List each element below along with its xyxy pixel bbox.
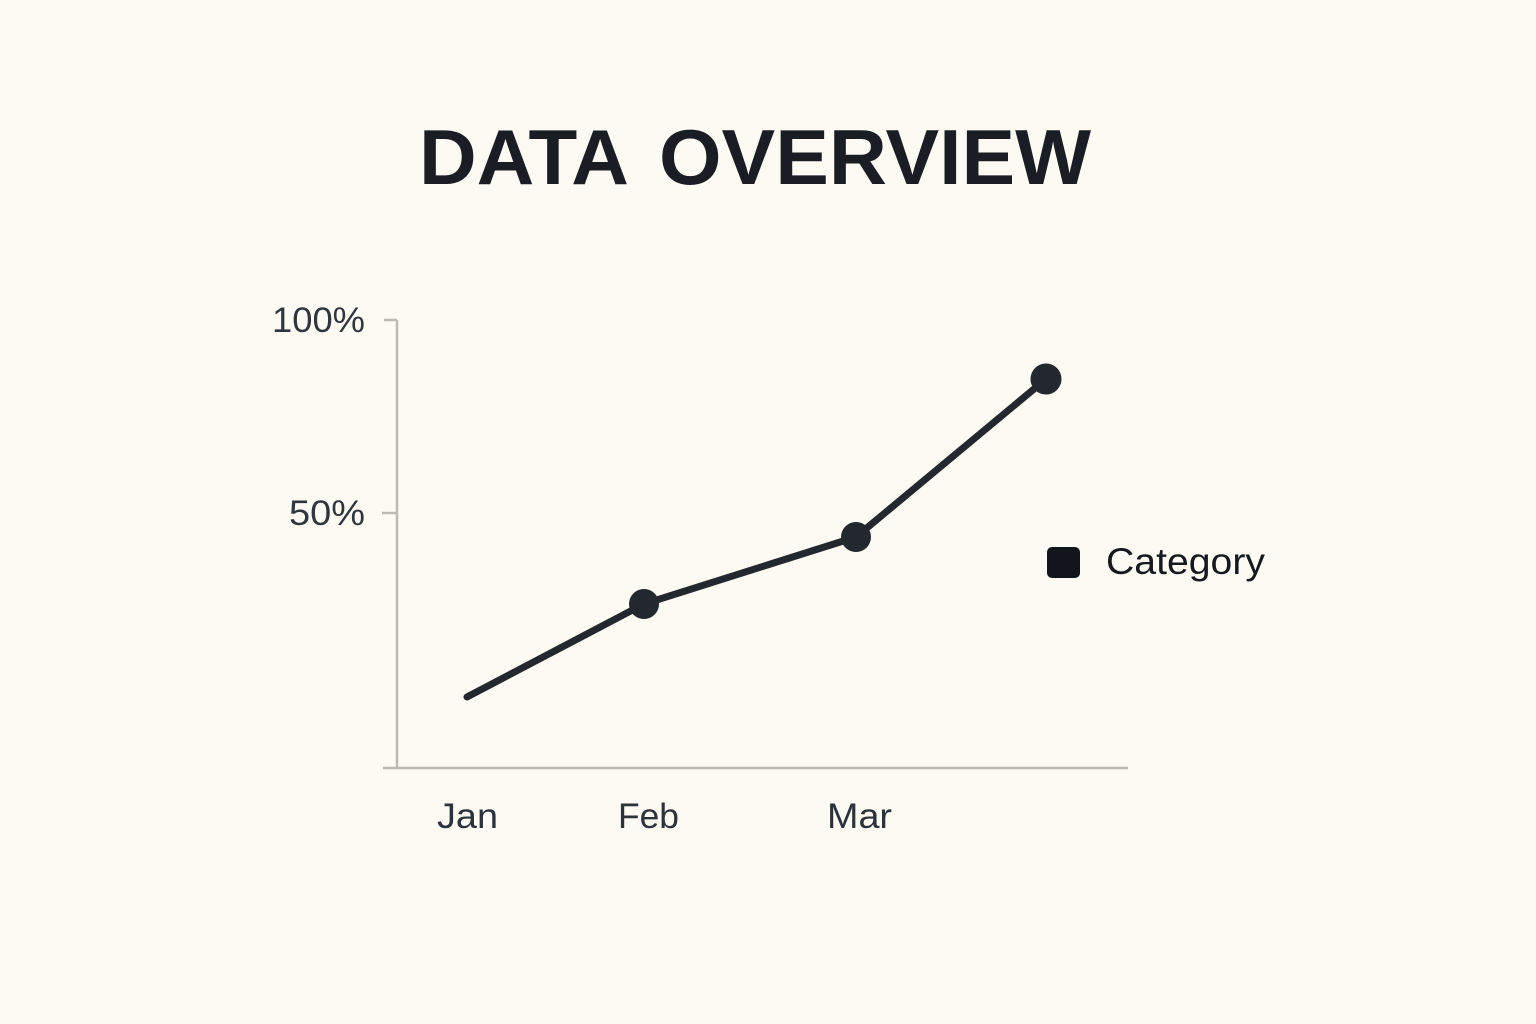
title: DATA xyxy=(419,113,629,201)
x axis label: Mar: Mar xyxy=(827,797,892,836)
legend xyxy=(1047,541,1266,582)
title: OVERVIEW xyxy=(659,113,1091,201)
x axis xyxy=(383,767,1128,769)
line chart xyxy=(272,301,1128,836)
data point: Feb xyxy=(629,589,659,619)
legend swatch xyxy=(1047,547,1080,578)
data point: Mar xyxy=(841,522,871,552)
legend label: Category xyxy=(1106,541,1266,582)
data point: Apr xyxy=(1030,364,1062,394)
data line xyxy=(467,379,1046,697)
x axis label: Feb: Feb xyxy=(618,797,679,836)
x axis label: Jan: Jan xyxy=(437,797,498,836)
y axis xyxy=(382,320,397,768)
title xyxy=(419,113,1091,201)
y axis label: 100%: 100% xyxy=(272,301,365,340)
y axis label: 50%: 50% xyxy=(289,494,365,533)
